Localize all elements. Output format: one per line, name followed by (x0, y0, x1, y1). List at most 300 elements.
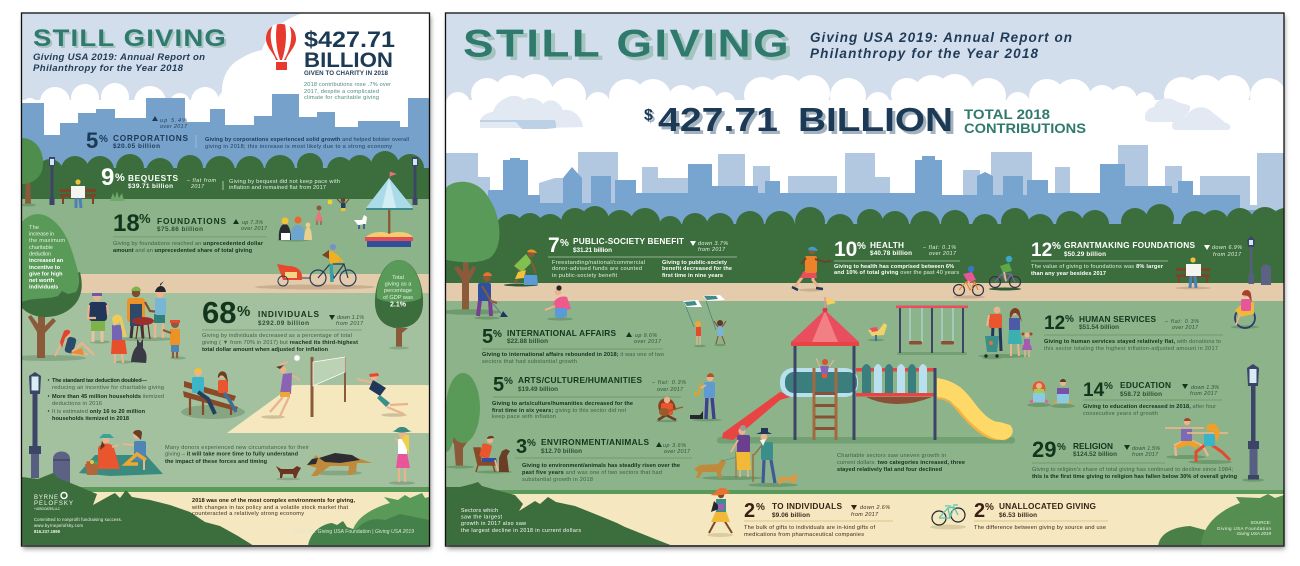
stat: individuals: down 1.1% (337, 315, 364, 321)
text: largest decline: saw the largest (461, 514, 503, 520)
stat: human services (1044, 313, 1223, 352)
stat: foundations: up 7.3% (242, 220, 263, 226)
man reading on bench (1175, 257, 1211, 289)
text: tax changes: More than 45 million households itemized (52, 394, 164, 400)
stat: to individuals: medications from pharmaceutical companies (744, 532, 864, 538)
skyline (22, 94, 429, 168)
stat: corporations: CORPORATIONS (113, 133, 188, 143)
skyline: near buildings (446, 156, 1284, 240)
stat: arts culture humanities: 5 (493, 374, 504, 396)
text: new circumstances (165, 445, 309, 465)
hills: bottom left (446, 482, 673, 546)
hills: bottom left (22, 473, 254, 546)
stat: environment animals: Giving to environment/animals has steadily risen over the (522, 463, 680, 469)
stat: to individuals: from 2017 (851, 512, 879, 518)
tree: top left (20, 138, 43, 206)
callout tree: left: individuals (29, 284, 58, 290)
total label: TOTAL 2018 (964, 106, 1050, 122)
wheelchair woman (1231, 290, 1259, 329)
total label: CONTRIBUTIONS (964, 120, 1086, 136)
lawn lower (22, 293, 429, 488)
text: uneven growth (837, 453, 965, 473)
stat: international affairs: up 9.6% (635, 333, 657, 339)
stat: bequests: % (115, 172, 125, 184)
sky (446, 13, 1284, 103)
total amount: $ (644, 107, 653, 124)
stat: international affairs: % (493, 329, 502, 340)
stat: arts culture humanities: keep pace with inflation (492, 414, 556, 420)
stat: corporations: $20.05 billion (113, 143, 160, 150)
stat: individuals: INDIVIDUALS (258, 309, 319, 319)
panel: left infographic (10, 13, 429, 546)
stat: bequests: 9 (101, 164, 114, 191)
context text: 2018 contributions rose .7% over (304, 82, 391, 88)
hills: bottom right (1158, 494, 1284, 546)
stat: public-society benefit: donor-advised funds are counted (552, 266, 642, 272)
stat: individuals: from 2017 (336, 321, 364, 327)
stat: to individuals: TO INDIVIDUALS (772, 501, 842, 511)
stat: public-society benefit: in public-society benefit (552, 273, 617, 279)
stat: education: 14 (1083, 380, 1105, 401)
plant (110, 191, 124, 201)
dachshund (276, 466, 301, 480)
stat: education: $58.72 billion (1120, 391, 1162, 398)
stat: international affairs: $22.88 billion (507, 338, 548, 345)
path (80, 274, 429, 293)
stat: human services: this sector totaling the highest inflation-adjusted amount in 2017 (1044, 346, 1218, 352)
stat: religion (1032, 437, 1238, 480)
stat: international affairs: over 2017 (634, 339, 662, 345)
callout tree: right: of GDP was (383, 295, 413, 301)
stat: education: EDUCATION (1120, 380, 1171, 390)
family seated from behind (277, 216, 312, 242)
stat: unallocated giving: 2 (974, 500, 985, 522)
text: largest decline (461, 508, 581, 534)
text: tax changes: households itemized in 2018 (52, 416, 129, 422)
stat: religion: RELIGION (1073, 441, 1113, 451)
subtitle (33, 54, 205, 73)
title: STILL GIVING (467, 26, 795, 69)
stat: education (1083, 380, 1222, 417)
lawn upper (22, 199, 429, 275)
skyline: far buildings (446, 145, 1284, 240)
stat: corporations: Giving by corporations experienced solid growth and helped bolster overall (205, 137, 409, 143)
text: new circumstances: Many donors experienced new circumstances for their (165, 445, 309, 451)
stat: human services: over 2017 (1172, 325, 1199, 331)
callout tree: left: incentive to (29, 265, 61, 271)
panel: right infographic (438, 13, 1299, 546)
cyclist with trailer (255, 244, 375, 290)
woman with hat (389, 427, 415, 485)
stat: individuals: 68 (202, 295, 236, 330)
lamp post: large right (1242, 364, 1264, 482)
logo: byrne pelofsky: www.byrnepelofsky.com (34, 523, 84, 528)
stat: arts culture humanities: first time in six years; giving to this sector did not (492, 408, 626, 414)
child in structure (816, 358, 834, 378)
stat: unallocated giving (974, 500, 1108, 531)
stat: arts culture humanities: ARTS/CULTURE/HUMANITIES (518, 375, 642, 385)
stat: to individuals: % (756, 502, 765, 513)
logo: byrne pelofsky: 816.237.1999 (34, 529, 61, 534)
hedge (22, 151, 429, 200)
stat: corporations (86, 116, 409, 149)
stat: corporations: % (99, 134, 108, 145)
playground structure (717, 297, 1015, 444)
stat: arts culture humanities: % (504, 376, 513, 387)
stat: bequests: 2017 (190, 184, 205, 190)
stat: health: % (857, 241, 866, 252)
students with laptops (1027, 379, 1075, 408)
stat: grantmaking foundations: from 2017 (1213, 252, 1242, 258)
callout tree: right (375, 260, 423, 350)
text: complex environment: 2018 was one of the most complex environments for giving, (192, 498, 355, 504)
stat: corporations: over 2017 (160, 124, 188, 130)
stat: human services: $51.54 billion (1079, 324, 1119, 331)
subtitle (810, 30, 1072, 61)
stat: international affairs: sectors that had substantial growth (482, 359, 577, 365)
text: tax changes: The standard tax deduction doubled— (52, 378, 147, 384)
slats (856, 364, 936, 404)
stat: to individuals: 2 (744, 500, 755, 522)
total amount: $ (646, 109, 655, 126)
trash can: hedge (1261, 264, 1271, 285)
stat: bequests: $39.71 billion (128, 183, 173, 190)
person picking litter (504, 249, 538, 286)
toy horse (354, 215, 367, 229)
text: tax changes: It is estimated only 16 to 20 million (52, 409, 146, 415)
stat: environment animals: ENVIRONMENT/ANIMALS (541, 437, 649, 447)
stat: international affairs: INTERNATIONAL AFFAIRS (507, 328, 616, 338)
stat: health: – flat: 0.1% (922, 245, 956, 251)
stat: foundations: 18 (113, 210, 140, 237)
title: STILL GIVING (35, 27, 229, 54)
stat: corporations: up 5.4% (160, 118, 187, 124)
subtitle: Philanthropy for the Year 2018 (810, 46, 1038, 61)
stat: unallocated giving: The difference between giving by source and use (974, 525, 1106, 531)
elderly couple with dogs (694, 425, 798, 487)
stat: education: from 2017 (1190, 391, 1218, 397)
cream ground (446, 494, 1284, 546)
girl with backpack (545, 285, 573, 320)
stat: grantmaking foundations: down 6.9% (1212, 245, 1242, 251)
swings (896, 306, 968, 355)
text: new circumstances: giving – it will take more time to fully understand (165, 452, 299, 458)
text: largest decline: Sectors which (461, 508, 498, 514)
tree: large left (440, 182, 500, 315)
children on bikes (953, 256, 1021, 298)
stat: foundations: $75.86 billion (157, 226, 203, 233)
stat: human services: Giving to human services stayed relatively flat, with donations to (1044, 339, 1221, 345)
stat: bequests: – flat from (186, 178, 216, 184)
stat: environment animals: over 2017 (664, 449, 691, 455)
tube (780, 368, 858, 397)
stat: international affairs (482, 326, 664, 365)
title: STILL GIVING (463, 22, 791, 66)
stat: arts culture humanities: $19.49 billion (518, 386, 558, 393)
stat: education: consecutive years of growth (1083, 411, 1158, 417)
source: SOURCE: (1250, 520, 1271, 525)
stat: grantmaking foundations: GRANTMAKING FOUNDATIONS (1064, 240, 1195, 250)
stat: environment animals: past five years and was one of two sectors that had (522, 470, 662, 476)
person raking (474, 272, 508, 320)
stat: public-society benefit: $31.21 billion (573, 247, 612, 254)
stat: grantmaking foundations: $50.29 billion (1064, 251, 1106, 258)
stat: religion: from 2017 (1132, 452, 1159, 458)
stat: grantmaking foundations (1031, 240, 1242, 277)
stat: grantmaking foundations: than any year besides 2017 (1031, 271, 1106, 277)
stat: foundations: Giving by foundations reached an unprecedented dollar (113, 241, 264, 247)
stat: human services: HUMAN SERVICES (1079, 314, 1156, 324)
callout tree: left: deduction (29, 252, 51, 258)
stat: education: Giving to education decreased in 2018, after four (1083, 404, 1216, 410)
stat: international affairs: 5 (482, 326, 493, 348)
stat: corporations: 5 (86, 128, 98, 153)
logo: byrne pelofsky (34, 492, 122, 534)
context text: 2017, despite a complicated (304, 89, 379, 95)
source: Giving USA 2019 (1237, 531, 1271, 536)
saxophone player (690, 373, 722, 421)
stat: health: over 2017 (929, 251, 957, 257)
total amount: 427.71 (658, 101, 778, 138)
cloud: left (480, 96, 583, 129)
text: tax changes: reducing an incentive for charitable giving (52, 385, 164, 391)
sky (22, 14, 301, 100)
lamp post: large left (29, 372, 41, 478)
stat: foundations: over 2017 (241, 226, 268, 232)
sandbox with umbrella (365, 172, 413, 247)
roller skater (792, 247, 831, 292)
yoga pair (1165, 418, 1232, 464)
callout tree: right: 2.1% (390, 302, 407, 308)
german shepherd (307, 453, 372, 476)
lamp: right (412, 157, 418, 205)
woman sitting on grass (55, 330, 94, 356)
stat: grantmaking foundations: The value of giving to foundations was 8% larger (1031, 264, 1164, 270)
total amount: GIVEN TO CHARITY IN 2018 (304, 70, 389, 77)
stat: public-society benefit: % (560, 238, 569, 249)
stat: human services: % (1065, 314, 1074, 325)
icon: teal bicycle (930, 505, 966, 530)
source: Giving USA Foundation (1217, 526, 1271, 531)
ground band (80, 487, 429, 492)
clouds (22, 14, 429, 103)
walking woman (707, 488, 733, 537)
stat: health: and 10% of total giving over the past 40 years (834, 270, 959, 276)
stat: individuals: total dollar amount when adjusted for inflation (202, 347, 329, 353)
title (34, 29, 226, 48)
text: uneven growth: current dollars: two categories increased, three (837, 460, 965, 466)
stat: health: Giving to health has comprised between 6% (834, 264, 954, 270)
text: complex environment: with changes in tax policy and a volatile stock market that (191, 505, 348, 511)
couple on bench (181, 368, 245, 419)
lamp: left (49, 157, 55, 205)
stat: public-society benefit: from 2017 (698, 247, 726, 253)
stat: bequests: Giving by bequest did not keep pace with (229, 179, 340, 185)
text: new circumstances: the impact of these forces and timing (165, 459, 268, 465)
stat: environment animals (515, 436, 692, 483)
stat: foundations (113, 214, 268, 253)
subtitle: Giving USA 2019: Annual Report on (810, 30, 1072, 45)
kite children (683, 295, 726, 347)
stat: to individuals: The bulk of gifts to individuals are in-kind gifts of (744, 525, 875, 531)
callout tree: left: increased an (29, 258, 64, 264)
total amount: BILLION (798, 101, 953, 138)
stat: grantmaking foundations: % (1052, 241, 1061, 252)
stat: environment animals: up 3.6% (663, 443, 686, 449)
children with ball (315, 198, 349, 225)
callout tree: left: increase in (29, 232, 54, 238)
stat: grantmaking foundations: 12 (1031, 240, 1052, 261)
volleyball net (294, 355, 346, 417)
stat: international affairs: Giving to international affairs rebounded in 2018; it was one of two (482, 352, 664, 358)
stat: bequests: BEQUESTS (128, 173, 178, 183)
volleyball sand (227, 385, 429, 433)
lamp: hedge (1247, 236, 1255, 284)
stat: religion: this is the first time giving to religion has fallen below 30% of overall giving (1032, 474, 1238, 480)
path (446, 283, 1284, 302)
red slide (722, 392, 790, 440)
volleyball woman (261, 362, 300, 419)
callout tree: left (22, 214, 86, 361)
roof (791, 310, 859, 342)
logo: byrne pelofsky: BYRNE (34, 495, 58, 501)
stat: individuals: giving ( ▼ from 70% in 2017) but reached its third-highest (202, 340, 358, 346)
text: complex environment: counteracted a relatively strong economy (192, 511, 304, 517)
lawn (446, 301, 1284, 491)
logo: byrne pelofsky: Committed to nonprofit fundraising success. (34, 517, 122, 522)
callout tree: right: Total (392, 275, 404, 281)
callout tree: left: give for high (29, 272, 63, 278)
stat: to individuals (744, 500, 893, 538)
stat: to individuals: $9.06 billion (772, 512, 810, 519)
stat: to individuals: down 2.6% (860, 505, 890, 511)
total amount (304, 30, 394, 75)
icon: balloon (266, 24, 296, 70)
barbecue group (88, 281, 186, 364)
man reading on bench (60, 179, 96, 208)
cream ground (92, 492, 429, 545)
stat: public-society benefit: 7 (548, 234, 560, 257)
hills: bottom right (308, 493, 429, 546)
stat: arts culture humanities: over 2017 (657, 387, 684, 393)
text: largest decline: growth in 2017 also saw (461, 521, 526, 527)
volleyball man (357, 373, 408, 417)
stat: education: % (1104, 381, 1113, 392)
guitar player (656, 397, 683, 422)
stat: health: $40.78 billion (870, 250, 912, 257)
source: SOURCE: Giving USA Foundation | Giving USA 2019 (293, 529, 414, 535)
text: uneven growth: Charitable sectors saw uneven growth in (837, 453, 946, 459)
callout tree: left: the maximum (29, 238, 65, 244)
trash can (53, 452, 70, 484)
hedge (446, 204, 1299, 284)
stat: bequests (102, 168, 340, 190)
stat: foundations: % (139, 211, 151, 226)
stat: human services: – flat: 0.3% (1164, 319, 1199, 325)
stat: environment animals: substantial growth in 2018 (522, 477, 593, 483)
subtitle: Philanthropy for the Year 2018 (33, 63, 184, 74)
stat: public-society benefit: benefit decreased for the (662, 266, 732, 272)
stat: public-society benefit: PUBLIC-SOCIETY BENEFIT (573, 236, 684, 246)
stat: corporations: giving in 2018; this increase is most likely due to a strong economy (205, 144, 392, 150)
callout tree: left: The (29, 225, 39, 231)
stat: individuals (202, 302, 364, 352)
stat: religion: down 1.5% (1132, 446, 1160, 452)
total amount: BILLION (801, 104, 956, 141)
stat: unallocated giving: $6.53 billion (999, 512, 1037, 519)
callout tree: right: giving as a (385, 282, 412, 288)
stat: foundations: FOUNDATIONS (157, 216, 226, 226)
stat: individuals: $292.09 billion (258, 320, 309, 327)
clouds band (445, 74, 1286, 230)
stat: health: 10 (834, 238, 857, 261)
stat: individuals: Giving by individuals decreased as a percentage of total (202, 333, 352, 339)
logo: byrne pelofsky: PELOFSKY (34, 501, 73, 507)
callout tree: right: percentage (384, 288, 412, 294)
stat: individuals: % (237, 303, 250, 320)
total amount (644, 101, 956, 141)
text: tax changes (48, 378, 164, 422)
family (978, 307, 1032, 359)
stat: environment animals: 3 (516, 436, 527, 458)
context text: climate for charitable giving (304, 95, 379, 101)
stat: foundations: amount and an unprecedented share of total giving (113, 248, 253, 254)
callout tree: left: net worth (29, 278, 55, 284)
stat: public-society benefit: down 3.7% (698, 241, 728, 247)
total label (964, 106, 1086, 136)
subtitle: Giving USA 2019: Annual Report on (33, 52, 205, 63)
stat: religion: 29 (1032, 437, 1056, 462)
stat: public-society benefit: Giving to public-society (662, 260, 728, 266)
total amount: BILLION (304, 49, 393, 72)
stat: environment animals: $12.70 billion (541, 448, 582, 455)
source (1217, 520, 1271, 536)
stat: arts culture humanities: Giving to arts/culture/humanities decreased for the (492, 401, 633, 407)
context text (304, 82, 391, 101)
text: largest decline: the largest decline in 2018 in current dollars (461, 528, 581, 534)
yellow slide (937, 378, 1013, 440)
man with dog on chair (474, 436, 512, 474)
logo: byrne pelofsky: + ASSOCIATES, LLC (34, 507, 61, 511)
stat: health (834, 238, 960, 276)
cloud: right (1145, 98, 1230, 130)
stat: unallocated giving: UNALLOCATED GIVING (999, 501, 1096, 511)
ground band (446, 490, 1284, 495)
stat: religion: Giving to religion's share of total giving has continued to decline since 1984; (1032, 467, 1233, 473)
stat: arts culture humanities (492, 374, 686, 420)
total amount: 427.71 (661, 104, 781, 141)
stat: religion: $124.52 billion (1073, 451, 1117, 458)
stat: health: HEALTH (870, 240, 904, 250)
posts (794, 346, 796, 440)
stat: environment animals: % (527, 438, 536, 449)
text: tax changes: deductions in 2016 (52, 401, 102, 407)
stat: human services: 12 (1044, 313, 1065, 334)
total amount: $427.71 (304, 27, 395, 52)
stat: bequests: inflation and remained flat from 2017 (229, 185, 326, 191)
title: STILL GIVING (33, 25, 227, 52)
tree: small left (438, 373, 480, 468)
text: complex environment (191, 498, 355, 517)
stat: arts culture humanities: – flat: 0.3% (651, 380, 686, 386)
stat: religion: % (1057, 442, 1066, 453)
stat: unallocated giving: % (985, 502, 994, 513)
callout tree: left: charitable (29, 245, 53, 251)
text: uneven growth: stayed relatively flat and four declined (837, 467, 943, 473)
stat: public-society benefit: Freestanding/national/commercial (552, 260, 645, 266)
toy horse (868, 323, 887, 341)
stat: education: down 1.3% (1191, 385, 1219, 391)
